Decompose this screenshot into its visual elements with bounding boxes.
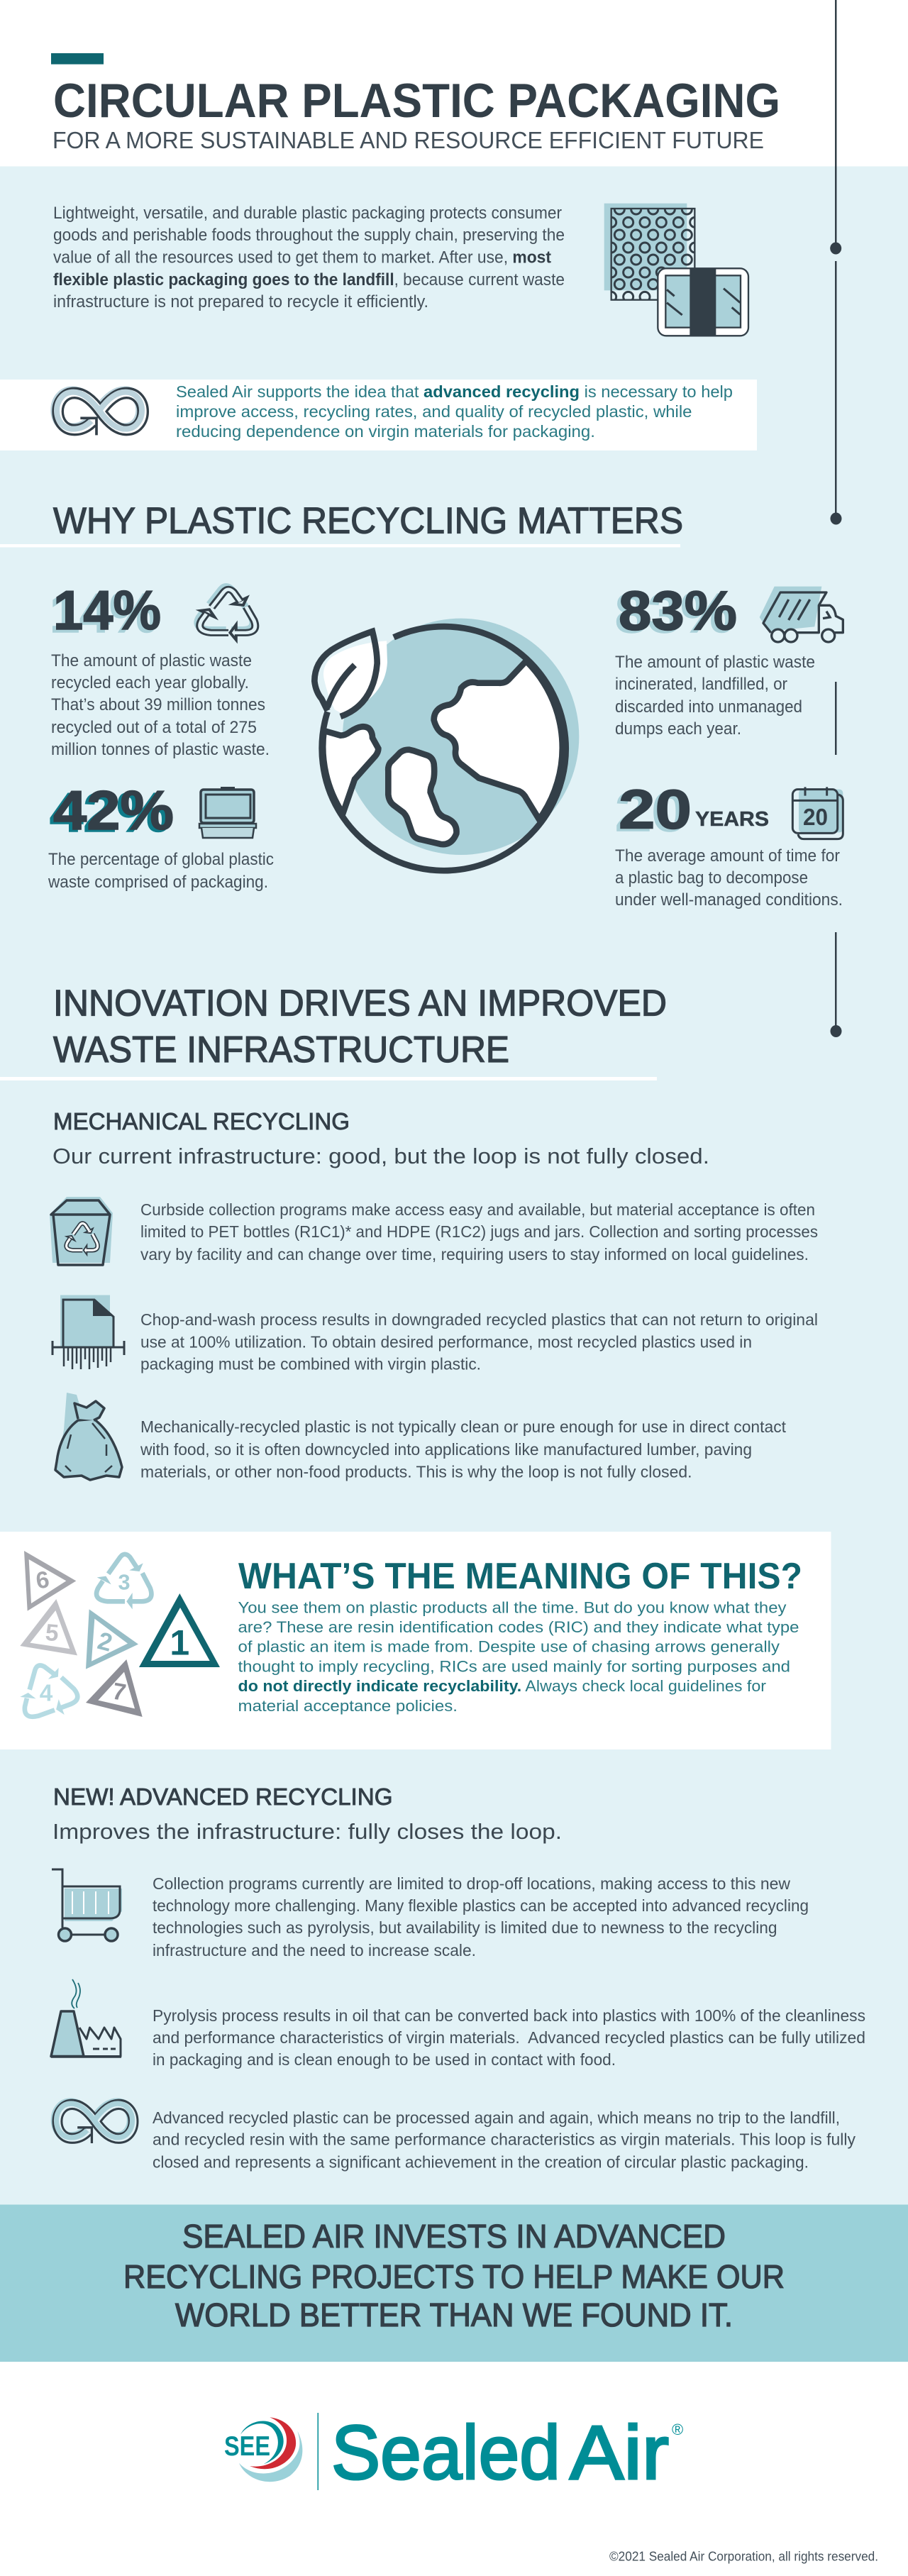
text: advanced recycled plastic: Advanced recycled plastic can be processed again and again, which means no trip to the landfill, — [153, 2108, 840, 2127]
heading: innovation drives an improved waste infrastructure: INNOVATION DRIVES AN IMPROVED — [53, 983, 667, 1024]
stat text: 83%: incinerated, landfilled, or — [615, 675, 787, 694]
light background panel — [0, 166, 908, 2205]
icon group: resin identification triangles: 3 — [118, 1571, 131, 1595]
stat: 20 years: 20 — [615, 780, 688, 843]
panel text: material acceptance policies. — [238, 1697, 458, 1715]
stat text: 42%: The percentage of global plastic — [48, 850, 274, 869]
logo wordmark: Air — [570, 2409, 669, 2495]
heading: innovation drives an improved waste infrastructure: WASTE INFRASTRUCTURE — [53, 1029, 509, 1071]
panel text: of plastic an item is made from. Despite use of chasing arrows generally — [238, 1637, 780, 1656]
logo wordmark: Sealed — [331, 2409, 560, 2495]
intro paragraph: goods and perishable foods throughout the supply chain, preserving the — [53, 226, 565, 245]
stat: 20 years: 20 — [619, 778, 692, 840]
timeline line with dots — [830, 0, 841, 1037]
icon: globe with leaf — [314, 619, 579, 870]
icon: infinity loop — [56, 2103, 133, 2143]
text: curbside collection: vary by facility and can change over time, requiring users to stay informed on local guidelines. — [140, 1245, 809, 1264]
text: collection programs: technology more challenging. Many flexible plastics can be accepted into advanced recycling — [153, 1896, 809, 1915]
registered mark: ® — [672, 2421, 683, 2438]
stat text: 42% — [48, 850, 274, 892]
icon: bubble wrap and tray — [604, 204, 748, 336]
subtitle: FOR A MORE SUSTAINABLE AND RESOURCE EFFICIENT FUTURE — [52, 127, 764, 153]
stat text: 83% — [615, 653, 815, 739]
callout text: improve access, recycling rates, and quality of recycled plastic, while — [176, 402, 692, 421]
stat text: 20 years — [615, 846, 843, 910]
stat text: 14%: The amount of plastic waste — [51, 651, 252, 670]
text: curbside collection: Curbside collection programs make access easy and available, but material acceptance is often — [140, 1200, 815, 1219]
text: collection programs — [153, 1874, 809, 1959]
advanced recycling intro line: Improves the infrastructure: fully closes the loop. — [52, 1819, 562, 1844]
closing statement text: SEALED AIR INVESTS IN ADVANCED — [182, 2218, 726, 2255]
callout text: reducing dependence on virgin materials for packaging. — [176, 422, 595, 441]
stat: 20 years: YEARS — [695, 808, 769, 831]
heading: why plastic recycling matters: WHY PLASTIC RECYCLING MATTERS — [53, 501, 683, 542]
text: pyrolysis process: in packaging and is clean enough to be used in contact with food. — [153, 2050, 616, 2069]
stat text: 14%: recycled out of a total of 275 — [51, 718, 257, 737]
text: chop and wash: Chop-and-wash process results in downgraded recycled plastics that can not return to original — [140, 1310, 818, 1329]
text: chop and wash: packaging must be combined with virgin plastic. — [140, 1355, 481, 1373]
stat text: 14% — [51, 651, 270, 759]
text: mechanically recycled: with food, so it is often downcycled into applications like manufactured lumber, paving — [140, 1440, 752, 1459]
icon group: resin identification triangles: 6 — [34, 1566, 51, 1594]
panel: closing statement band — [0, 2205, 908, 2362]
icon: garbage truck — [760, 587, 843, 642]
stat text: 14%: That’s about 39 million tonnes — [51, 695, 265, 714]
icon group: resin identification triangles: 7 — [111, 1679, 128, 1706]
copyright: ©2021 Sealed Air Corporation, all rights reserved. — [609, 2550, 878, 2564]
stat: 14%: 14% — [53, 579, 161, 641]
closing statement text — [123, 2218, 785, 2333]
text: collection programs: technologies such as pyrolysis, but availability is limited due to newness to the recycling — [153, 1918, 777, 1937]
text: mechanically recycled: Mechanically-recycled plastic is not typically clean or pure enough for use in direct contact — [140, 1417, 787, 1436]
stat: 14%: 14% — [50, 582, 157, 644]
panel text: are? These are resin identification codes (RIC) and they indicate what type — [238, 1618, 799, 1636]
icon: recycling bin — [50, 1197, 113, 1265]
panel text — [238, 1599, 799, 1715]
panel heading: WHAT’S THE MEANING OF THIS? — [238, 1556, 802, 1597]
text: mechanically recycled — [140, 1417, 787, 1481]
panel text: You see them on plastic products all the time. But do you know what they — [238, 1599, 787, 1616]
icon: plastic container — [199, 787, 256, 838]
closing statement text: WORLD BETTER THAN WE FOUND IT. — [175, 2296, 733, 2333]
icon: recycling arrows — [197, 587, 255, 640]
callout text — [176, 382, 733, 441]
text: pyrolysis process: and performance characteristics of virgin materials. Advanced recycled plastics can be fully utilized — [153, 2028, 865, 2047]
title accent bar — [51, 53, 104, 65]
text: curbside collection: limited to PET bottles (R1C1)* and HDPE (R1C2) jugs and jars. Collection and sorting processes — [140, 1222, 818, 1241]
stat text: 83%: dumps each year. — [615, 719, 741, 739]
stat text: 20 years: under well-managed conditions. — [615, 890, 843, 910]
text: collection programs: Collection programs currently are limited to drop-off locations, making access to this new — [153, 1874, 790, 1893]
stat text: 83%: The amount of plastic waste — [615, 653, 815, 672]
stat: 20 years — [615, 778, 769, 843]
panel text: thought to imply recycling, RICs are used mainly for sorting purposes and — [238, 1657, 790, 1676]
text: collection programs: infrastructure and the need to increase scale. — [153, 1941, 476, 1959]
icon: shredder — [52, 1295, 125, 1369]
icon group: resin identification triangles: 5 — [44, 1620, 60, 1647]
icon group: resin identification triangles: 4 — [40, 1680, 53, 1706]
text: advanced recycled plastic: and recycled resin with the same performance characteristics as virgin materials. This loop is fully — [153, 2130, 856, 2148]
text: mechanically recycled: materials, or other non-food products. This is why the loop is not fully closed. — [140, 1463, 692, 1481]
panel: what's the meaning of this — [0, 1532, 831, 1749]
logo mark text: SEE — [224, 2431, 270, 2462]
stat text: 14%: recycled each year globally. — [51, 673, 249, 692]
intro paragraph: Lightweight, versatile, and durable plastic packaging protects consumer — [53, 204, 562, 223]
icon: factory — [51, 1979, 121, 2057]
stat: 83%: 83% — [619, 579, 737, 641]
stat: 42%: 42% — [53, 779, 174, 841]
mechanical recycling intro line: Our current infrastructure: good, but the loop is not fully closed. — [52, 1144, 709, 1168]
icon: shopping cart — [52, 1869, 122, 1941]
text: chop and wash: use at 100% utilization. To obtain desired performance, most recycled plastics used in — [140, 1332, 752, 1351]
text: chop and wash — [140, 1310, 818, 1373]
closing statement text: RECYCLING PROJECTS TO HELP MAKE OUR — [123, 2258, 785, 2295]
icon: calendar — [792, 787, 843, 839]
stat text: 42%: waste comprised of packaging. — [48, 873, 268, 892]
callout text: Sealed Air supports the idea that advanced recycling is necessary to help — [176, 382, 733, 401]
icon group: resin identification triangles: 1 — [170, 1623, 189, 1662]
title: CIRCULAR PLASTIC PACKAGING — [53, 74, 780, 128]
icon: infinity loop — [56, 392, 143, 435]
intro paragraph — [53, 204, 565, 311]
text: pyrolysis process — [153, 2006, 865, 2069]
logo: Sealed Air — [224, 2409, 683, 2495]
logo mark: crescents — [239, 2417, 302, 2482]
stat text: 20 years: The average amount of time for — [615, 846, 840, 866]
icon: plastic bag — [55, 1393, 122, 1480]
calendar number: 20 — [803, 804, 828, 830]
panel text: do not directly indicate recyclability. Always check local guidelines for — [238, 1677, 767, 1695]
stat: 42%: 42% — [50, 781, 170, 844]
intro paragraph: infrastructure is not prepared to recycle it efficiently. — [53, 292, 428, 311]
intro paragraph: value of all the resources used to get them to market. After use, most — [53, 248, 551, 267]
stat text: 83%: discarded into unmanaged — [615, 697, 802, 717]
heading: innovation drives an improved waste infrastructure — [53, 983, 667, 1071]
icon group: resin identification triangles — [12, 1551, 220, 1727]
subheading: mechanical recycling: MECHANICAL RECYCLING — [53, 1108, 350, 1134]
text: advanced recycled plastic — [153, 2108, 856, 2171]
stat text: 20 years: a plastic bag to decompose — [615, 868, 808, 888]
intro paragraph: flexible plastic packaging goes to the landfill, because current waste — [53, 270, 565, 289]
icon group: resin identification triangles: 2 — [95, 1627, 115, 1657]
stat: 83%: 83% — [615, 582, 733, 644]
panel: advanced recycling callout — [0, 380, 757, 450]
text: curbside collection — [140, 1200, 818, 1264]
stat text: 14%: million tonnes of plastic waste. — [51, 740, 270, 759]
text: advanced recycled plastic: closed and represents a significant achievement in the creation of circular plastic packaging. — [153, 2152, 809, 2171]
subheading: new advanced recycling: NEW! ADVANCED RECYCLING — [53, 1784, 393, 1810]
text: pyrolysis process: Pyrolysis process results in oil that can be converted back into plastics with 100% of the cleanliness — [153, 2006, 865, 2025]
